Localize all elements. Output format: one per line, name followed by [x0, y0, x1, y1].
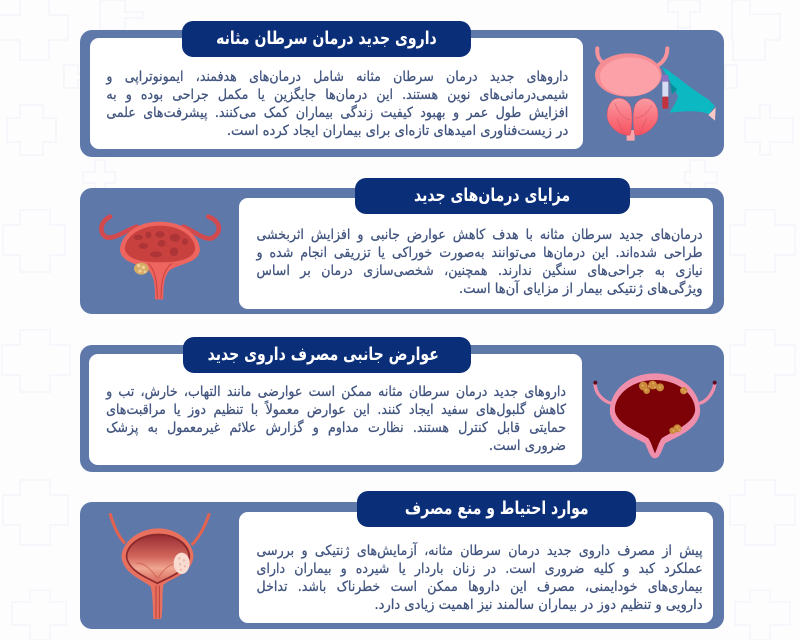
heading: new bladder cancer drug — [182, 21, 471, 57]
text box: new bladder cancer drug — [90, 38, 583, 149]
panel: advantages of new treatments — [80, 188, 724, 314]
heading: side effects of the new drug: عوارض جانبی مصرف داروی جدید — [207, 344, 438, 365]
body text: advantages of new treatments: درمان‌های جدید سرطان مثانه با هدف کاهش عوارض جانبی و افزایش اثربخشی — [257, 227, 703, 243]
body text: precautions and contraindications: عملکرد کبد و کلیه ضروری است. در زنان باردار یا شیرده و بیماران دارای — [257, 561, 703, 577]
text box: advantages of new treatments — [239, 198, 713, 309]
body text: advantages of new treatments: ویژگی‌های ژنتیکی بیمار از مزایای آن‌ها است. — [459, 281, 703, 297]
heading: side effects of the new drug — [183, 337, 471, 373]
body text: side effects of the new drug — [105, 384, 566, 454]
heading: precautions and contraindications — [357, 491, 636, 527]
text box: precautions and contraindications — [239, 512, 713, 623]
panel: new bladder cancer drug — [80, 30, 724, 157]
text box: side effects of the new drug — [89, 354, 582, 465]
body text: new bladder cancer drug: داروهای جدید درمان سرطان مثانه شامل درمان‌های هدفمند، ایمونوتراپی و — [106, 69, 568, 85]
panel: precautions and contraindications — [80, 502, 724, 629]
body text: new bladder cancer drug: شیمی‌درمانی‌های نوین هستند. این درمان‌ها جایگزین یا مکمل جراحی بوده و به — [106, 87, 568, 103]
body text: side effects of the new drug: کاهش گلبول‌های سفید ایجاد کنند. این عوارض معمولاً با تنظیم دوز یا مراقبت‌های — [106, 402, 566, 418]
body text: precautions and contraindications — [257, 542, 703, 613]
body text: precautions and contraindications: پیش از مصرف داروی جدید درمان سرطان مثانه، آزمایش‌های ژنتیکی و بررسی — [257, 543, 703, 559]
body text: advantages of new treatments: طراحی شده‌اند. این درمان‌ها می‌توانند به‌صورت خوراکی یا تزریقی انجام شده و — [257, 245, 703, 261]
body text: new bladder cancer drug: افزایش طول عمر و بهبود کیفیت زندگی بیماران کمک می‌کنند. پیشرفت‌های علمی — [106, 105, 568, 121]
panel: side effects of the new drug — [80, 345, 724, 472]
heading: precautions and contraindications: موارد احتیاط و منع مصرف — [405, 498, 588, 519]
body text: side effects of the new drug: ضروری است. — [489, 438, 566, 454]
heading: advantages of new treatments — [355, 178, 630, 214]
body text: advantages of new treatments — [256, 227, 703, 297]
body text: advantages of new treatments: نیازی به جراحی‌های سنگین ندارند. همچنین، شخصی‌سازی درمان بر اساس — [257, 263, 703, 279]
body text: new bladder cancer drug: در زیست‌فناوری امیدهای تازه‌ای برای بیماران ایجاد کرده است. — [227, 123, 568, 139]
body text: new bladder cancer drug — [106, 69, 568, 139]
heading: advantages of new treatments: مزایای درمان‌های جدید — [414, 185, 571, 206]
icon: bladder with tumour, red — [99, 214, 222, 300]
heading: new bladder cancer drug: داروی جدید درمان سرطان مثانه — [216, 28, 437, 49]
icon: bladder and prostate with gloved hand holding vial — [595, 46, 716, 141]
icon: bladder with tumours, dark maroon — [593, 373, 717, 458]
body text: side effects of the new drug: داروهای جدید درمان سرطان مثانه ممکن است عوارضی مانند التهاب، خارش، تب و — [106, 384, 566, 400]
body text: precautions and contraindications: دارویی و تنظیم دوز در بیماران سالمند نیز اهمیت زیادی دارد. — [375, 597, 703, 613]
body text: precautions and contraindications: بیماری‌های خودایمنی، مصرف این داروها ممکن است خطرناک باشد. تداخل — [257, 579, 703, 595]
icon: bladder cross-section with tumour — [108, 512, 211, 619]
body text: side effects of the new drug: حمایتی قابل کنترل هستند. نظارت مداوم و گزارش علائم غیرمعمول به پزشک — [106, 420, 566, 436]
